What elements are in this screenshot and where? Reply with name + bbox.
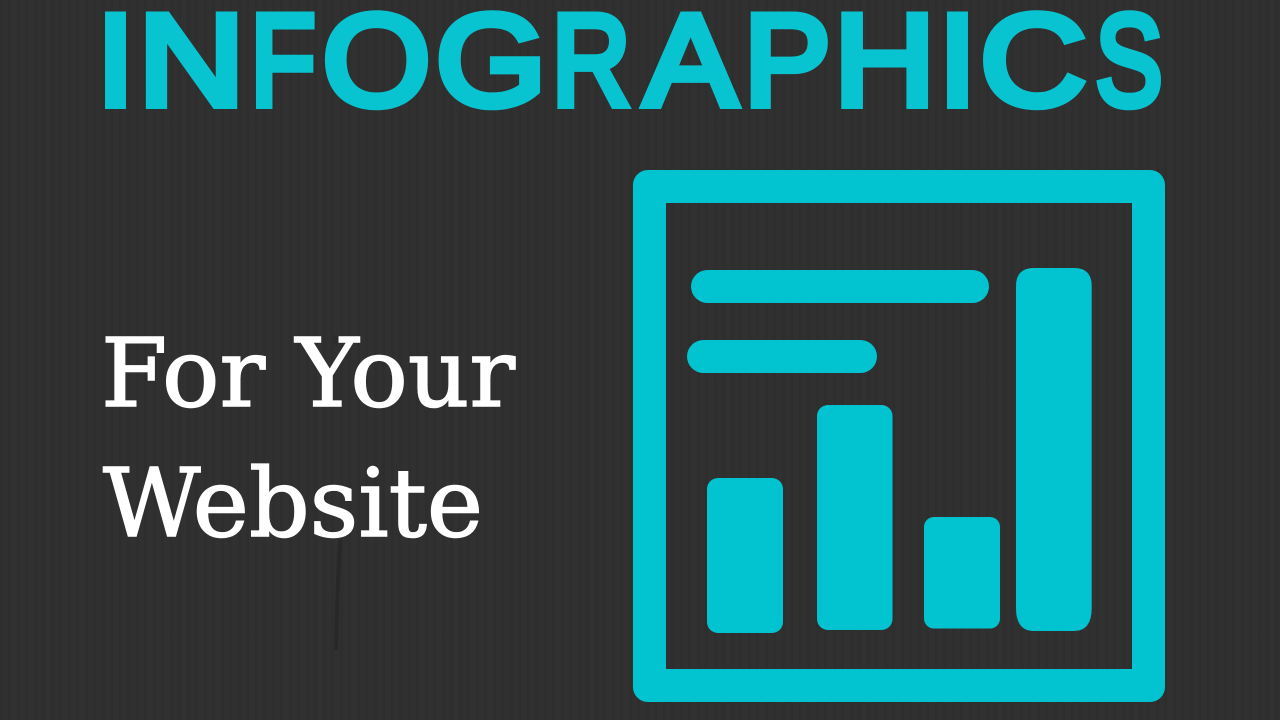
text line 1 — [691, 270, 989, 303]
subtitle — [101, 319, 516, 559]
icon frame — [633, 170, 1165, 702]
subtitle: For Your — [101, 319, 516, 429]
bar 1 — [707, 478, 783, 633]
icon: chart in frame — [633, 170, 1165, 702]
bar 4 — [1016, 268, 1092, 631]
subtitle: Website — [103, 449, 483, 559]
bar 3 — [924, 517, 1000, 628]
bar 2 — [817, 405, 892, 630]
text line 2 — [687, 340, 877, 373]
